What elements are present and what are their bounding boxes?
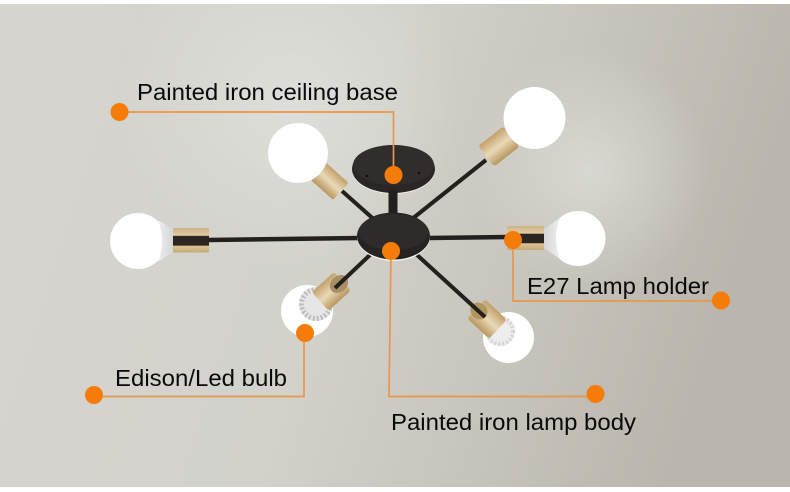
bulb: upper right [478,87,566,166]
bulb: left [110,213,209,269]
bulb: right [507,211,606,266]
callout: Edison/Led bulb [85,324,314,404]
callout: painted iron ceiling base [110,79,402,184]
label: lamp body: Painted iron lamp body [391,409,637,435]
arm: right [428,237,510,238]
stem [388,190,398,218]
label: lamp holder: E27 Lamp holder [527,273,709,299]
arm: upper left [342,191,378,223]
bulb: upper left [268,123,349,200]
lamp fixture [110,87,606,363]
arm: lower left [335,253,372,288]
label: ceiling base: Painted iron ceiling base [137,79,398,105]
arm: left [208,238,360,240]
arm: upper right [412,160,486,219]
arm: lower right [416,254,485,317]
callout: E27 lamp holder [504,231,730,310]
callout: painted iron lamp body [382,242,637,435]
ceiling base plate [352,145,435,194]
bulb: lower right [416,254,534,363]
bulb: lower left [281,253,372,337]
central hub [357,212,430,261]
label: bulb: Edison/Led bulb [115,365,287,391]
